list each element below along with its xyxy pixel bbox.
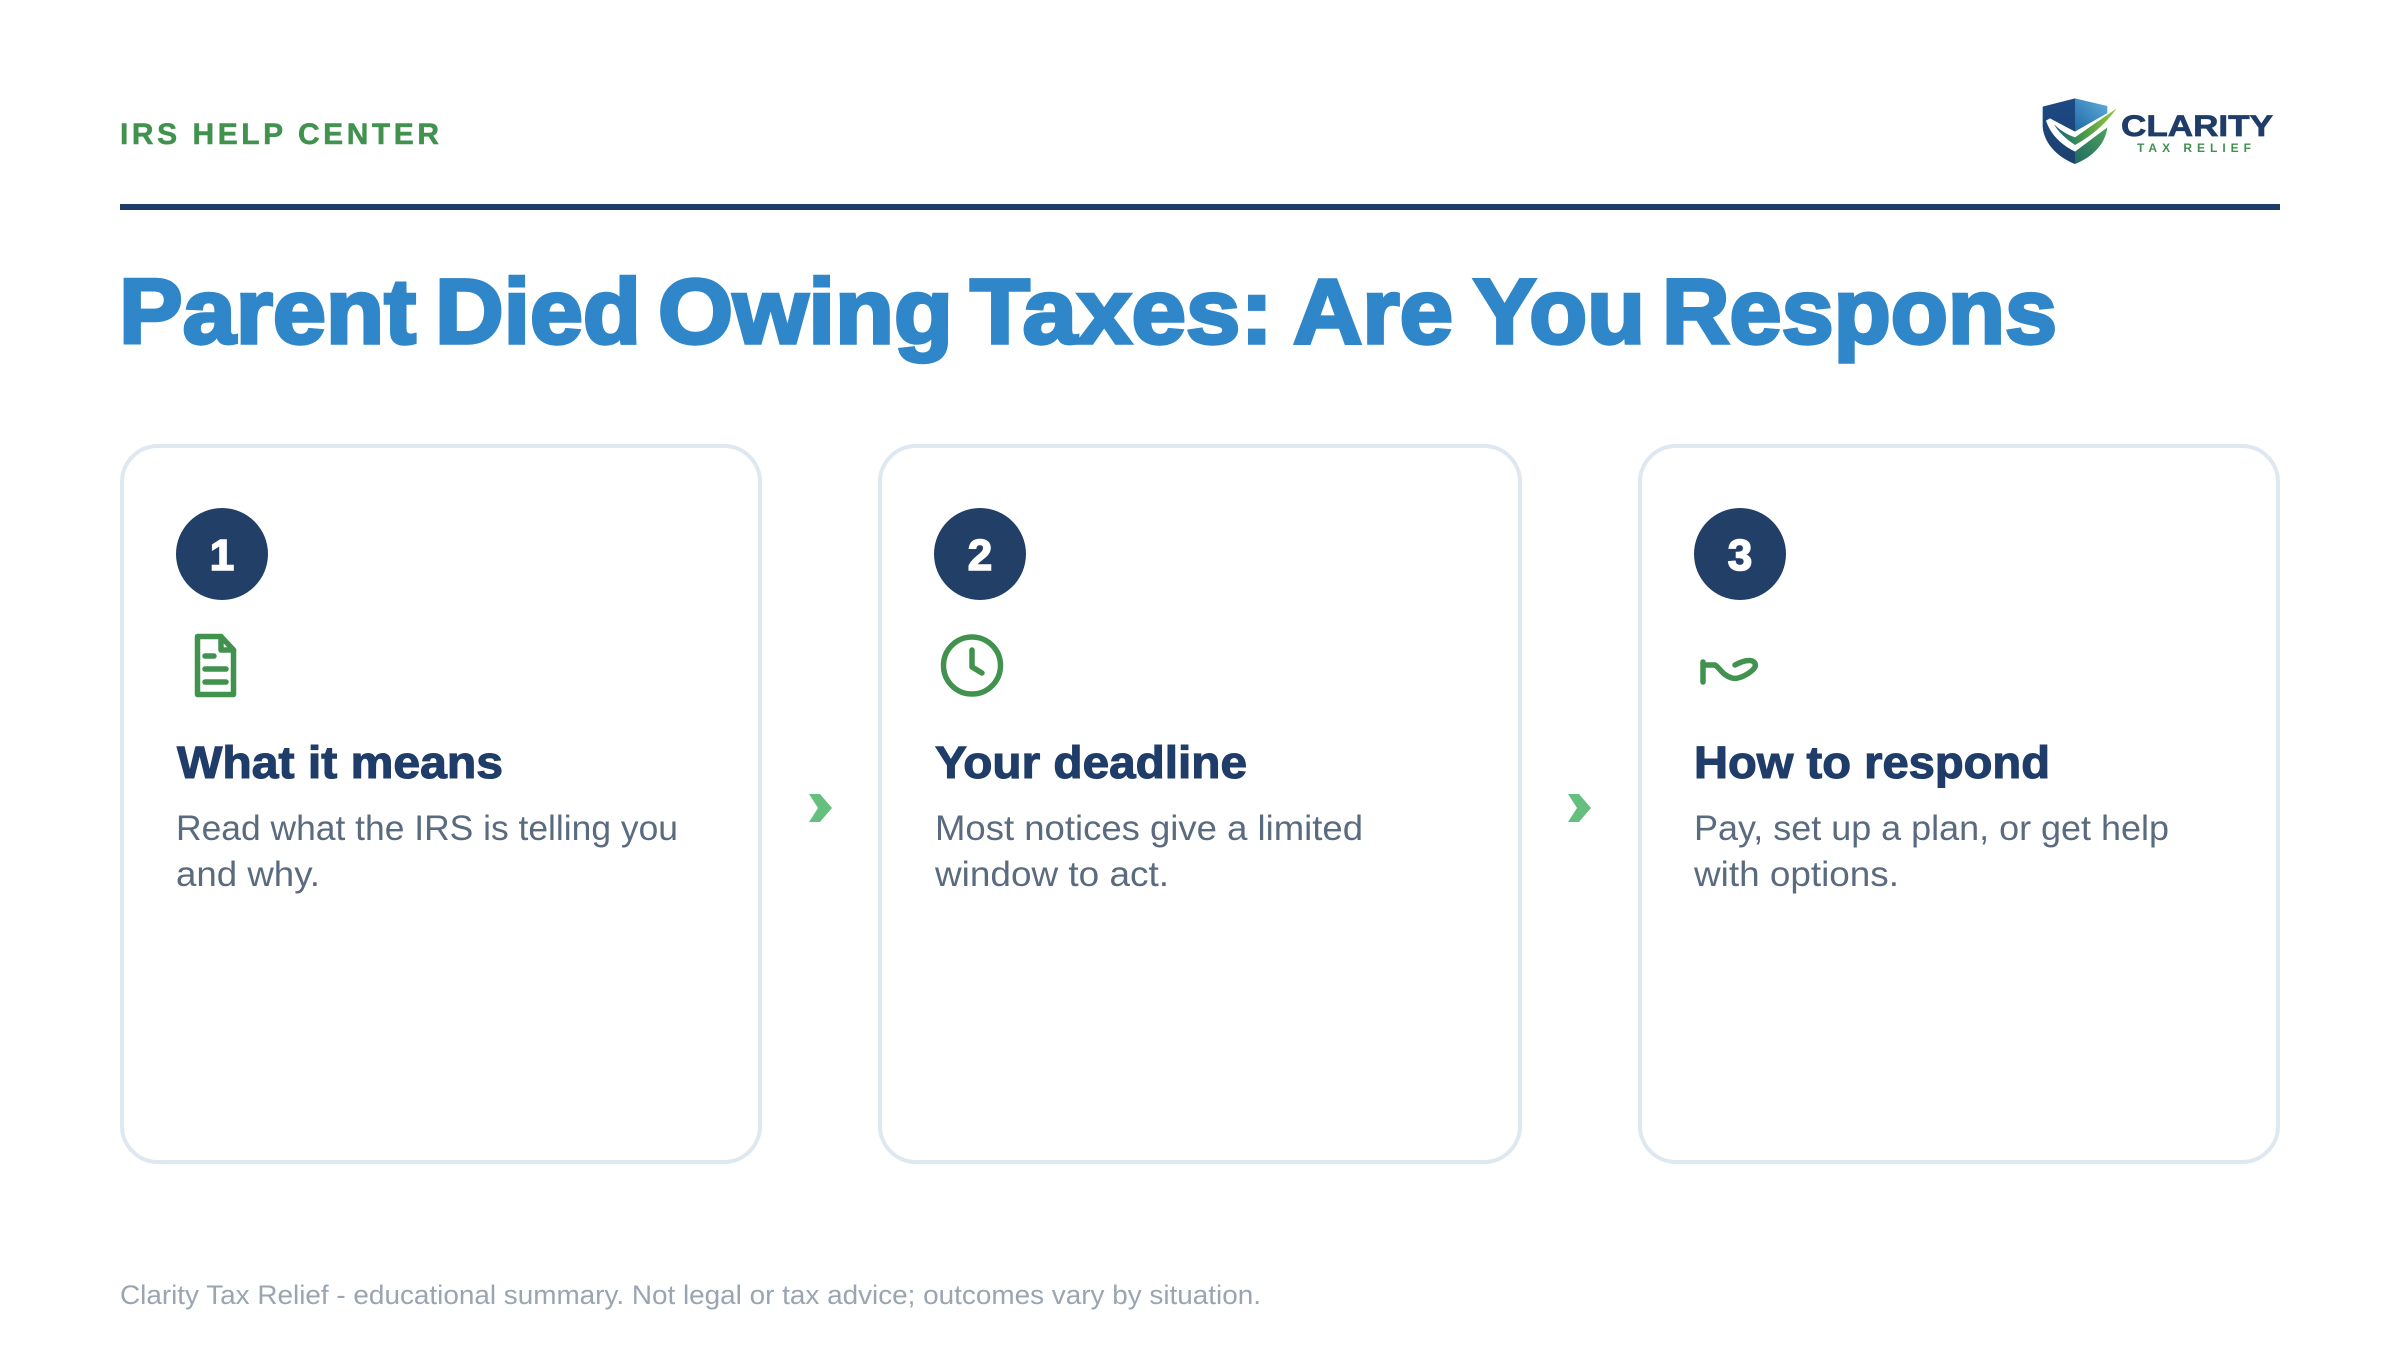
card body text: with options.	[1693, 855, 1899, 894]
icon: signature squiggle	[1703, 661, 1755, 682]
card heading: Your deadline	[935, 737, 1247, 788]
card outline	[122, 446, 760, 1162]
card body text	[176, 809, 678, 894]
card body text: and why.	[176, 855, 320, 894]
title: Are	[1293, 261, 1453, 363]
panel: your deadline	[880, 446, 1520, 1162]
step number 2	[934, 508, 1026, 600]
panel: how to respond	[1640, 446, 2278, 1162]
title: Owing	[658, 261, 953, 363]
panel: what it means	[122, 446, 760, 1162]
step number 3	[1694, 508, 1786, 600]
logo: Clarity Tax Relief	[2043, 98, 2273, 164]
step number 1: 1	[210, 531, 234, 580]
step number 2: 2	[968, 531, 992, 580]
title: Parent	[119, 261, 416, 363]
title: Died	[435, 261, 641, 363]
card body text: Most notices give a limited	[935, 809, 1363, 848]
eyebrow label: IRS HELP CENTER	[120, 118, 439, 151]
card outline	[880, 446, 1520, 1162]
card body text: Read what the IRS is telling you	[176, 809, 678, 848]
card heading: How to respond	[1694, 737, 2050, 788]
arrow 2	[1568, 794, 1591, 822]
logo tagline: TAX RELIEF	[2137, 141, 2251, 155]
logo shield icon	[2043, 98, 2117, 164]
title	[119, 261, 2057, 363]
card heading: What it means	[177, 737, 503, 788]
header rule	[120, 204, 2280, 210]
title: Taxes:	[970, 261, 1273, 363]
step number 3: 3	[1728, 531, 1752, 580]
card body text	[1693, 809, 2169, 894]
step number 1	[176, 508, 268, 600]
card outline	[1640, 446, 2278, 1162]
title: Respons	[1662, 261, 2057, 363]
icon: document	[198, 636, 234, 694]
footer disclaimer: Clarity Tax Relief - educational summary. Not legal or tax advice; outcomes vary by situation.	[120, 1280, 1261, 1310]
icon: clock	[944, 637, 1000, 694]
title: You	[1473, 261, 1645, 363]
card body text: Pay, set up a plan, or get help	[1694, 809, 2169, 848]
card body text	[934, 809, 1363, 894]
card body text: window to act.	[934, 855, 1169, 894]
logo wordmark: CLARITY	[2121, 110, 2273, 143]
arrow 1	[809, 794, 832, 822]
